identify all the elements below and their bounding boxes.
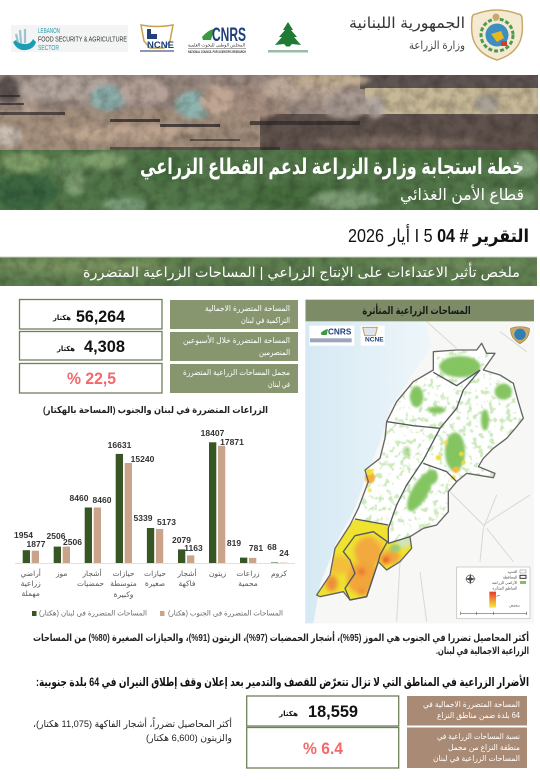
bars: Lebanon series	[23, 442, 278, 563]
stat: conflict area share	[247, 728, 399, 768]
Lebanon land mass with forest and crop cover	[353, 345, 522, 542]
category labels: وكبيرة	[114, 590, 134, 599]
insight paragraph	[33, 631, 529, 657]
logo: NCNE	[140, 25, 174, 52]
stat label: total damaged area: المساحة المتضررة الاجمالية	[205, 304, 290, 313]
summary band	[0, 256, 540, 289]
category labels: فاكهة	[179, 579, 196, 588]
stat label: last two weeks	[170, 332, 298, 361]
map legend: مرتفع	[492, 593, 500, 597]
category labels: حمضيات	[77, 579, 104, 588]
report number and date: التقرير # 04 I 5 أيار 2026	[348, 224, 529, 247]
legend	[32, 610, 283, 618]
stat label: share of damaged farmland	[170, 364, 298, 393]
stat label: total damaged area: التراكمية في لبنان	[241, 316, 290, 325]
map header: المساحات الزراعية المتأثرة	[362, 303, 471, 317]
stat label: conflict area total: المساحة المتضررة الاجمالية في	[423, 700, 520, 709]
icon: ministry emblem	[472, 10, 522, 60]
heat zone: south Lebanon	[318, 519, 411, 600]
photo banner	[0, 74, 540, 213]
value labels: 16631	[108, 440, 132, 450]
category labels: أشجار	[176, 568, 197, 578]
stat label: conflict area total: 64 بلدة ضمن مناطق النزاع	[437, 711, 521, 720]
map logos: NCNE	[365, 337, 384, 344]
stat label: share of damaged farmland: في لبنان	[268, 380, 290, 389]
stat: share of damaged farmland: % 22,5	[67, 370, 116, 388]
stat: area damaged in last two weeks	[20, 332, 162, 360]
value labels: 819	[227, 538, 241, 548]
logo: CNRS: CNRS	[212, 25, 246, 46]
crops note: أكثر المحاصيل تضرراً، أشجار الفاكهة (11,075 هكتار)،	[33, 717, 232, 730]
subtitle: قطاع الأمن الغذائي	[400, 184, 524, 205]
stat label: total damaged area	[170, 300, 298, 329]
legend: المساحات المتضررة في الجنوب (هكتار)	[168, 610, 283, 618]
category labels: صغيرة	[145, 579, 165, 588]
value labels: 2079	[172, 535, 191, 545]
value labels: 1877	[27, 539, 46, 549]
value labels: 17871	[220, 437, 244, 447]
stat label: last two weeks: المنصرمين	[259, 348, 290, 357]
bars: South series	[32, 446, 287, 563]
category labels: كروم	[271, 569, 287, 578]
stat label: share of damaged farmland: مجمل المساحات الزراعية المتضررة	[183, 368, 290, 377]
stat label: conflict area share: المساحات الزراعية في لبنان	[433, 754, 520, 763]
map legend	[457, 567, 530, 619]
value labels: 1954	[14, 530, 33, 540]
logo: cedar tree	[268, 22, 308, 52]
value labels: 5173	[157, 517, 176, 527]
stat: conflict area total: هكتار	[278, 710, 298, 718]
value labels: 1163	[184, 543, 203, 553]
value labels: 2506	[47, 531, 66, 541]
category labels: حيازات	[113, 569, 135, 578]
category labels: أشجار	[81, 568, 102, 578]
category labels: زراعية	[21, 579, 41, 588]
ministry name	[349, 15, 465, 52]
category labels	[20, 568, 287, 599]
category labels: محمية	[238, 579, 258, 588]
value labels: 8460	[93, 495, 112, 505]
governorate boundaries	[317, 343, 523, 600]
ministry name: وزارة الزراعة	[409, 40, 465, 52]
stat: share of damaged farmland	[20, 364, 162, 393]
map logos	[309, 326, 529, 346]
value labels: 8460	[70, 493, 89, 503]
category labels: موز	[55, 569, 67, 578]
stat: total damaged area: هكتار	[52, 314, 71, 322]
terrace shadows	[0, 95, 360, 150]
crops note	[33, 717, 232, 744]
stat label: conflict area share: منطقة النزاع من مجمل	[448, 743, 520, 752]
legend: المساحات المتضررة في لبنان (هكتار)	[39, 610, 147, 618]
stat: conflict area total: 18,559	[308, 703, 358, 721]
value labels: 5339	[134, 513, 153, 523]
category labels: حيازات	[144, 569, 166, 578]
logo: CNRS: NATIONAL COUNCIL FOR SCIENTIFIC RESEARCH	[188, 50, 246, 54]
stat label: conflict area share: نسبة المساحات الزراعية في	[437, 732, 520, 741]
stat: conflict area share: % 6.4	[303, 740, 344, 758]
stat label: conflict area share	[407, 728, 527, 768]
stat label: conflict area total	[407, 696, 527, 726]
logo: NCNE: NCNE	[147, 40, 174, 50]
stat: area damaged in last two weeks: هكتار	[56, 345, 75, 353]
ministry name: الجمهورية اللبنانية	[349, 15, 465, 32]
value labels: 68	[267, 542, 277, 552]
value labels: 781	[249, 543, 263, 553]
value labels: 2506	[63, 537, 82, 547]
map legend: المناطق المتأثرة	[492, 586, 517, 591]
logo: Lebanon food security and agriculture sector: SECTOR	[38, 43, 59, 52]
map legend: الحدود	[508, 570, 517, 574]
logo: CNRS: المجلس الوطني للبحوث العلمية	[188, 42, 245, 48]
category labels: متوسطة	[110, 579, 137, 588]
stat: total damaged area: 56,264	[76, 308, 126, 326]
map header	[305, 300, 534, 321]
stat: total damaged area	[20, 300, 162, 329]
stat: conflict area total	[247, 696, 399, 726]
crops note: والزيتون (6,600 هكتار)	[146, 733, 232, 744]
panel: affected agricultural areas map	[305, 300, 534, 623]
map background	[305, 300, 534, 623]
logo: CNRS	[188, 25, 246, 54]
value labels	[14, 428, 289, 558]
value labels: 15240	[131, 454, 155, 464]
logo: Lebanon food security and agriculture sector	[11, 25, 128, 52]
map legend: الأراضي الزراعية	[492, 580, 517, 585]
heat spots: Saida and Bekaa	[365, 441, 465, 492]
bar chart	[14, 428, 295, 618]
value labels: 18407	[201, 428, 225, 438]
value labels: 24	[279, 548, 289, 558]
logo: Lebanon food security and agriculture sector: FOOD SECURITY & AGRICULTURE	[38, 34, 127, 44]
summary band: ملخص تأثير الاعتداءات على الإنتاج الزراعي | المساحات الزراعية المتضررة	[83, 262, 520, 281]
category labels: زيتون	[209, 569, 227, 578]
stat: area damaged in last two weeks: 4,308	[84, 338, 125, 356]
category labels: مهملة	[22, 589, 40, 598]
stat label: last two weeks: المساحة المتضررة خلال الأسبوعين	[183, 335, 290, 345]
map legend: منخفض	[509, 603, 520, 607]
category labels: زراعات	[236, 569, 260, 578]
logo: Lebanon food security and agriculture sector: LEBANON	[38, 26, 60, 35]
chart title: الزراعات المتضررة في لبنان والجنوب (المساحة بالهكتار)	[43, 405, 268, 416]
category labels: أراضي	[20, 568, 41, 578]
map legend: المحافظة	[503, 575, 517, 579]
map logos: CNRS	[328, 326, 352, 336]
